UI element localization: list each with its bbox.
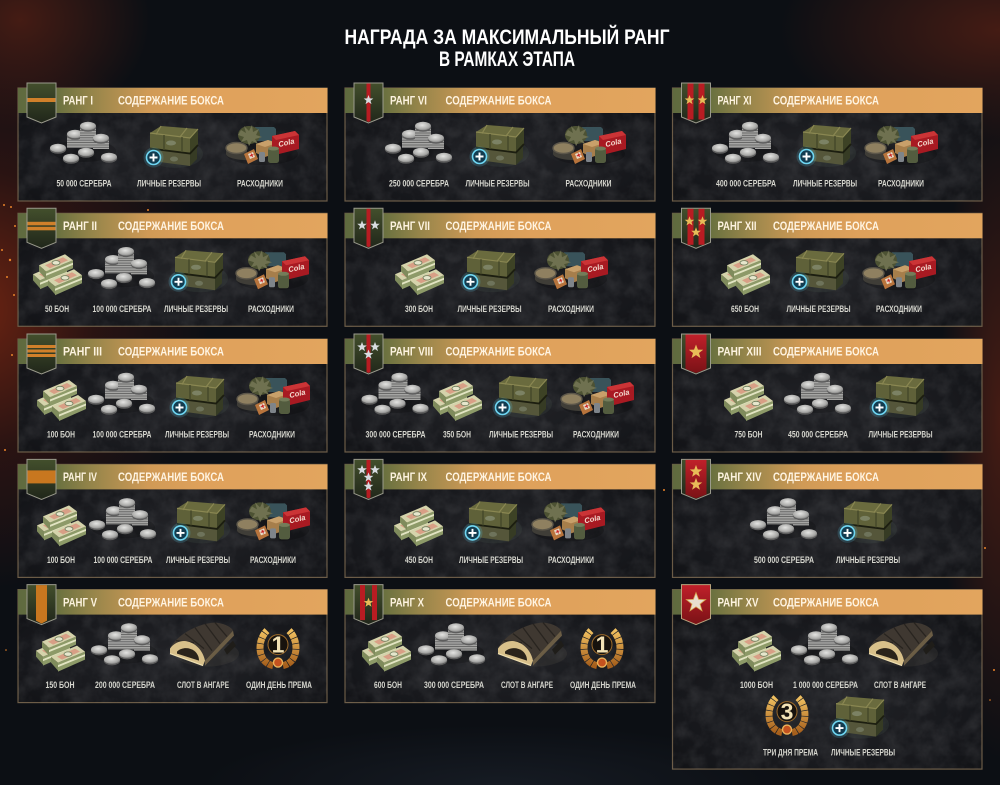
- panel: rank II: [18, 208, 328, 326]
- reward: bonds: 50 БОН: [45, 304, 69, 315]
- reward: bonds: [36, 631, 85, 691]
- reward: one premium day: [570, 631, 636, 691]
- rank title: РАНГ XIII: [718, 347, 762, 359]
- box contents heading: СОДЕРЖАНИЕ БОКСА: [118, 221, 224, 233]
- reward: silver: 250 000 СЕРЕБРА: [389, 178, 449, 190]
- box contents heading: СОДЕРЖАНИЕ БОКСА: [446, 96, 552, 108]
- rank title: РАНГ XV: [718, 597, 759, 609]
- reward: three premium days: ТРИ ДНЯ ПРЕМА: [763, 747, 818, 758]
- reward: bonds: 100 БОН: [47, 555, 75, 566]
- reward: silver: 50 000 СЕРЕБРА: [56, 178, 112, 190]
- rank badge: [27, 334, 56, 374]
- reward: bonds: [395, 254, 444, 315]
- reward: personal reserves: ЛИЧНЫЕ РЕЗЕРВЫ: [489, 430, 553, 440]
- reward: bonds: 750 БОН: [734, 430, 763, 440]
- reward: silver: [385, 122, 452, 190]
- panel: rank VI: [345, 83, 656, 201]
- box contents heading: СОДЕРЖАНИЕ БОКСА: [118, 96, 224, 108]
- panel: rank III: [18, 334, 328, 452]
- header bar: [672, 88, 982, 113]
- title: НАГРАДА ЗА МАКСИМАЛЬНЫЙ РАНГ: [344, 25, 670, 49]
- reward: personal reserves: ЛИЧНЫЕ РЕЗЕРВЫ: [164, 304, 228, 315]
- header bar: [345, 590, 656, 615]
- reward: bonds: [721, 254, 770, 315]
- panel: rank XII: [672, 208, 982, 326]
- reward: personal reserves: [489, 376, 553, 440]
- panel: rank XV: [672, 585, 982, 769]
- reward: bonds: [732, 631, 781, 691]
- panel: rank IX: [345, 459, 656, 577]
- reward: silver: [418, 623, 485, 691]
- rank title: РАНГ I: [63, 96, 93, 108]
- reward: silver: [750, 498, 817, 566]
- panel: rank XIII: [672, 334, 982, 452]
- reward: personal reserves: ЛИЧНЫЕ РЕЗЕРВЫ: [459, 555, 523, 566]
- reward: three premium days: 3: [781, 699, 793, 725]
- reward: bonds: 300 БОН: [405, 304, 433, 315]
- reward: hangar slot: [170, 623, 239, 691]
- rank badge: [27, 83, 56, 123]
- box contents heading: СОДЕРЖАНИЕ БОКСА: [446, 472, 552, 484]
- reward: bonds: 450 БОН: [405, 555, 433, 566]
- reward: personal reserves: [164, 250, 228, 315]
- box contents heading: СОДЕРЖАНИЕ БОКСА: [118, 347, 224, 359]
- reward: silver: 200 000 СЕРЕБРА: [95, 680, 155, 691]
- box contents heading: СОДЕРЖАНИЕ БОКСА: [773, 597, 879, 609]
- header bar: [672, 213, 982, 238]
- reward: consumables: [863, 250, 936, 315]
- box contents heading: СОДЕРЖАНИЕ БОКСА: [118, 472, 224, 484]
- header bar: [672, 590, 982, 615]
- reward: personal reserves: ЛИЧНЫЕ РЕЗЕРВЫ: [786, 304, 850, 315]
- reward: silver: [784, 373, 851, 440]
- rank title: РАНГ V: [63, 597, 97, 609]
- reward: one premium day: [246, 631, 312, 691]
- reward: hangar slot: [869, 623, 938, 691]
- reward: bonds: 650 БОН: [731, 304, 759, 315]
- reward: consumables: РАСХОДНИКИ: [878, 178, 924, 190]
- header bar: [672, 339, 982, 364]
- header bar: [672, 464, 982, 489]
- reward: consumables: РАСХОДНИКИ: [566, 178, 612, 190]
- reward: personal reserves: [137, 126, 203, 190]
- reward: bonds: [362, 631, 411, 691]
- reward: bonds: 100 БОН: [47, 430, 75, 440]
- rank badge: [27, 208, 56, 248]
- reward: personal reserves: ЛИЧНЫЕ РЕЗЕРВЫ: [466, 178, 530, 190]
- reward: personal reserves: ЛИЧНЫЕ РЕЗЕРВЫ: [165, 430, 229, 440]
- reward: silver: 100 000 СЕРЕБРА: [92, 304, 152, 315]
- reward: silver: [712, 122, 779, 190]
- reward: bonds: [33, 254, 82, 315]
- reward: personal reserves: [836, 501, 900, 566]
- reward: consumables: [226, 125, 299, 190]
- reward: personal reserves: [459, 501, 523, 566]
- panel: rank VII: [345, 208, 656, 326]
- rank title: РАНГ XIV: [718, 472, 762, 484]
- rank title: РАНГ XI: [718, 96, 752, 108]
- reward: three premium days: [763, 698, 818, 758]
- reward: hangar slot: СЛОТ В АНГАРЕ: [177, 680, 229, 691]
- box contents heading: СОДЕРЖАНИЕ БОКСА: [773, 96, 879, 108]
- reward: silver: 100 000 СЕРЕБРА: [92, 430, 152, 440]
- reward: personal reserves: ЛИЧНЫЕ РЕЗЕРВЫ: [793, 178, 857, 190]
- reward: personal reserves: [830, 697, 895, 758]
- panel: rank VIII: [345, 334, 656, 452]
- rank title: РАНГ VII: [390, 221, 430, 233]
- reward: consumables: [535, 250, 608, 315]
- rank badge: [682, 208, 710, 248]
- reward: personal reserves: ЛИЧНЫЕ РЕЗЕРВЫ: [137, 178, 201, 190]
- header bar: [18, 88, 328, 113]
- reward: one premium day: 1: [596, 632, 609, 658]
- reward: silver: 300 000 СЕРЕБРА: [424, 680, 484, 691]
- rank title: РАНГ VI: [390, 96, 427, 108]
- reward: consumables: РАСХОДНИКИ: [876, 304, 922, 315]
- rank title: РАНГ III: [63, 347, 102, 359]
- reward: consumables: [865, 125, 938, 190]
- reward: personal reserves: [166, 501, 230, 566]
- reward: personal reserves: [458, 250, 522, 315]
- rank title: РАНГ IX: [390, 472, 427, 484]
- box contents heading: СОДЕРЖАНИЕ БОКСА: [773, 221, 879, 233]
- panel: rank XI: [672, 83, 982, 201]
- rank title: РАНГ X: [390, 597, 424, 609]
- reward: personal reserves: ЛИЧНЫЕ РЕЗЕРВЫ: [836, 555, 900, 566]
- reward: consumables: РАСХОДНИКИ: [237, 178, 283, 190]
- reward: personal reserves: [165, 376, 229, 440]
- panel: rank V: [18, 585, 328, 703]
- reward: bonds: 150 БОН: [46, 680, 75, 691]
- reward: silver: [91, 623, 158, 691]
- reward: one premium day: 1: [272, 632, 285, 658]
- reward: bonds: [394, 505, 443, 566]
- reward: silver: 500 000 СЕРЕБРА: [754, 555, 814, 566]
- reward: personal reserves: ЛИЧНЫЕ РЕЗЕРВЫ: [458, 304, 522, 315]
- reward: personal reserves: ЛИЧНЫЕ РЕЗЕРВЫ: [166, 555, 230, 566]
- panel: rank XIV: [672, 459, 982, 577]
- box contents heading: СОДЕРЖАНИЕ БОКСА: [446, 597, 552, 609]
- reward: silver: [791, 623, 858, 691]
- reward: silver: [88, 247, 155, 315]
- reward: consumables: [237, 376, 310, 440]
- reward: consumables: РАСХОДНИКИ: [548, 555, 594, 566]
- box contents heading: СОДЕРЖАНИЕ БОКСА: [773, 472, 879, 484]
- header bar: [18, 339, 328, 364]
- reward: consumables: [532, 501, 605, 566]
- reward: silver: 450 000 СЕРЕБРА: [788, 430, 848, 440]
- rank title: РАНГ II: [63, 221, 97, 233]
- reward: consumables: [237, 501, 310, 566]
- rank badge: [682, 83, 710, 123]
- reward: silver: [361, 373, 429, 440]
- reward: one premium day: ОДИН ДЕНЬ ПРЕМА: [246, 680, 312, 691]
- title: [344, 25, 670, 71]
- header bar: [345, 339, 656, 364]
- reward: personal reserves: [793, 125, 857, 190]
- reward: hangar slot: СЛОТ В АНГАРЕ: [501, 680, 553, 691]
- reward: silver: 300 000 СЕРЕБРА: [366, 430, 426, 440]
- reward: silver: [89, 498, 156, 566]
- rank badge: [27, 585, 56, 625]
- reward: bonds: [724, 380, 773, 440]
- reward: consumables: РАСХОДНИКИ: [248, 304, 294, 315]
- reward: bonds: [37, 505, 86, 566]
- panel: rank IV: [18, 459, 328, 577]
- header bar: [345, 88, 656, 113]
- reward: consumables: [561, 376, 634, 440]
- header bar: [345, 464, 656, 489]
- header bar: [18, 590, 328, 615]
- header bar: [345, 213, 656, 238]
- reward: personal reserves: [786, 250, 850, 315]
- reward: one premium day: ОДИН ДЕНЬ ПРЕМА: [570, 680, 636, 691]
- panel: rank I: [18, 83, 328, 201]
- reward: hangar slot: СЛОТ В АНГАРЕ: [874, 680, 926, 691]
- header bar: [18, 464, 328, 489]
- reward: bonds: 600 БОН: [374, 680, 402, 691]
- reward: consumables: РАСХОДНИКИ: [548, 304, 594, 315]
- reward: silver: [88, 373, 155, 440]
- reward: consumables: [553, 125, 626, 190]
- rank title: РАНГ VIII: [390, 347, 433, 359]
- rank badge: [682, 585, 710, 625]
- sparks: [1, 204, 995, 701]
- reward: personal reserves: ЛИЧНЫЕ РЕЗЕРВЫ: [831, 747, 895, 758]
- reward: personal reserves: ЛИЧНЫЕ РЕЗЕРВЫ: [868, 430, 932, 440]
- reward: silver: [50, 122, 117, 190]
- rank badge: [27, 459, 56, 499]
- title: В РАМКАХ ЭТАПА: [439, 48, 575, 71]
- reward: bonds: 1000 БОН: [740, 680, 773, 691]
- box contents heading: СОДЕРЖАНИЕ БОКСА: [446, 347, 552, 359]
- panel: rank X: [345, 585, 656, 703]
- box contents heading: СОДЕРЖАНИЕ БОКСА: [773, 347, 879, 359]
- reward: consumables: РАСХОДНИКИ: [250, 555, 296, 566]
- rank badge: [682, 459, 710, 499]
- rank badge: [354, 334, 383, 374]
- rank title: РАНГ XII: [718, 221, 756, 233]
- reward: silver: 400 000 СЕРЕБРА: [716, 178, 776, 190]
- reward: hangar slot: [498, 623, 567, 691]
- reward: bonds: [37, 380, 86, 440]
- rank badge: [354, 208, 383, 248]
- rank title: РАНГ IV: [63, 472, 97, 484]
- header bar: [18, 213, 328, 238]
- reward: silver: 1 000 000 СЕРЕБРА: [793, 680, 858, 691]
- reward: personal reserves: [466, 125, 530, 190]
- box contents heading: СОДЕРЖАНИЕ БОКСА: [446, 221, 552, 233]
- rank badge: [354, 585, 383, 625]
- reward: silver: 100 000 СЕРЕБРА: [94, 555, 153, 566]
- reward: consumables: РАСХОДНИКИ: [573, 430, 619, 440]
- box contents heading: СОДЕРЖАНИЕ БОКСА: [118, 597, 224, 609]
- reward: consumables: [236, 250, 309, 315]
- rank badge: [682, 334, 710, 374]
- reward: bonds: [433, 380, 482, 440]
- rank badge: [354, 459, 383, 499]
- rank badge: [354, 83, 383, 123]
- reward: personal reserves: [868, 376, 932, 440]
- reward: bonds: 350 БОН: [443, 430, 471, 440]
- reward: consumables: РАСХОДНИКИ: [249, 430, 295, 440]
